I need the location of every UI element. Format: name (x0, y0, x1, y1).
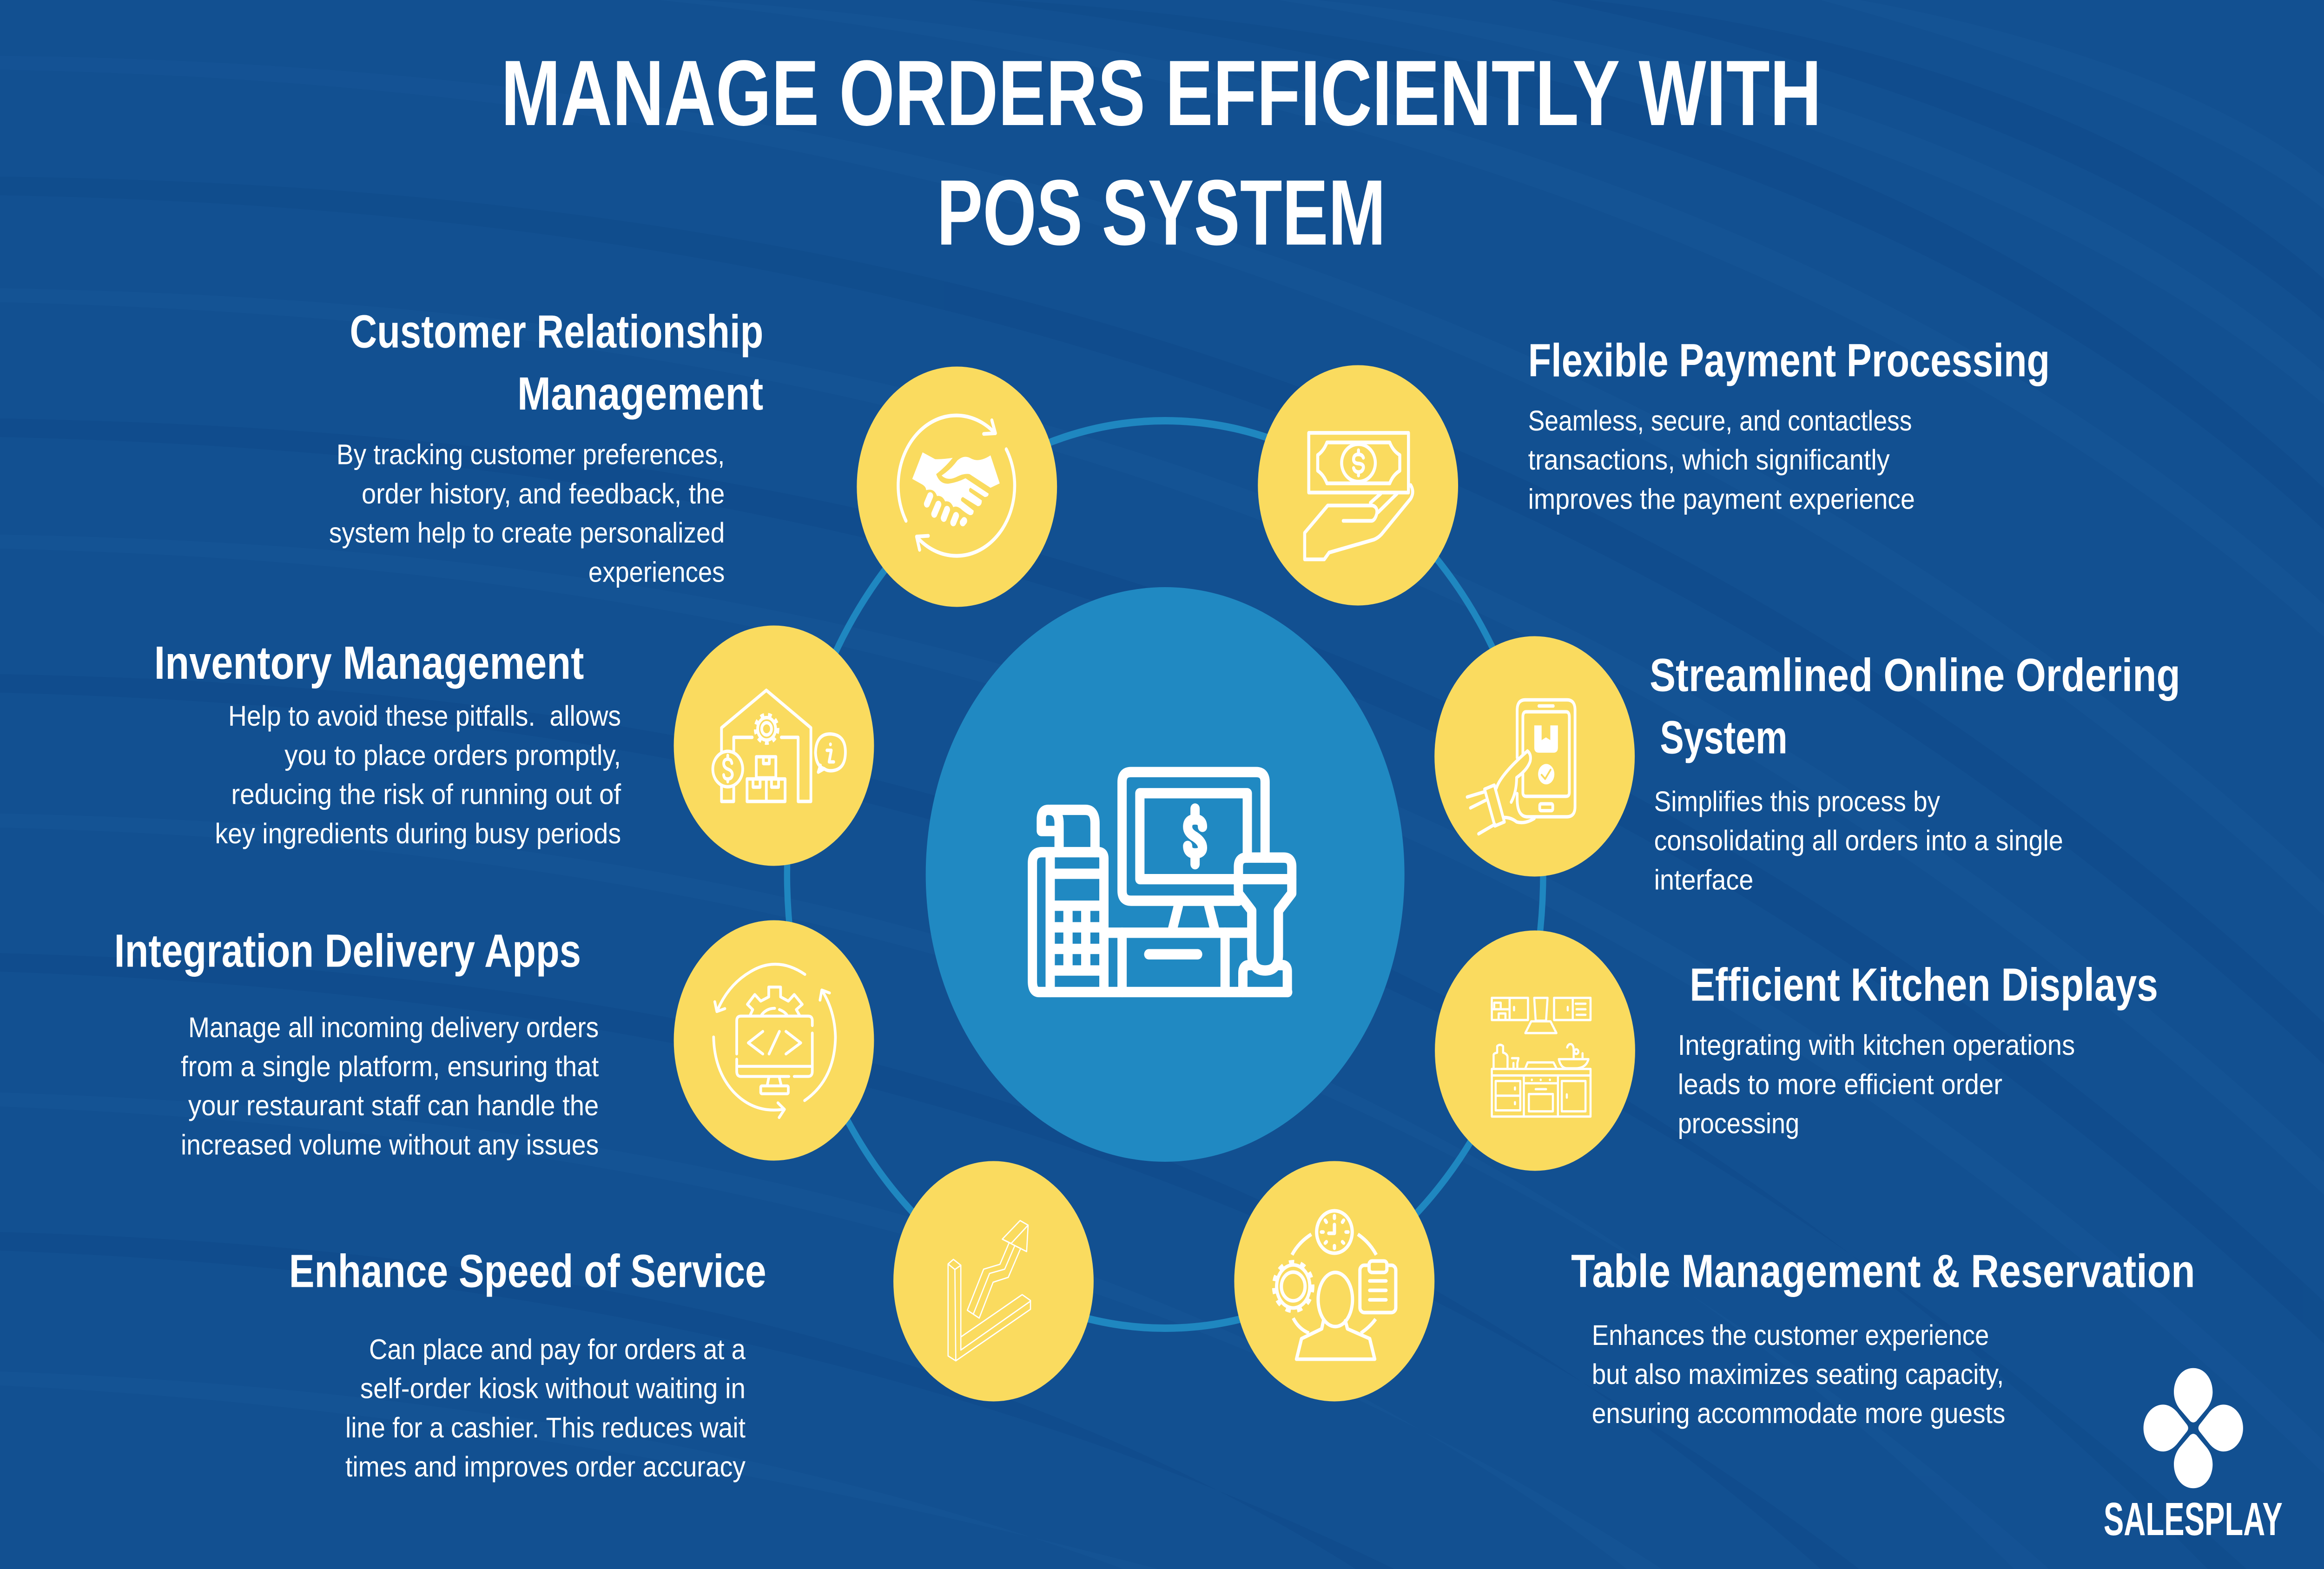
icon circle: speed of service (893, 1161, 1094, 1401)
body (329, 438, 725, 588)
body: By tracking customer preferences, (337, 438, 725, 470)
heading: Enhance Speed of Service (289, 1245, 766, 1297)
body: processing (1678, 1107, 1799, 1139)
icon circle: inventory (674, 626, 874, 866)
body: self-order kiosk without waiting in (360, 1372, 746, 1404)
heading: Streamlined Online Ordering (1650, 649, 2180, 701)
body (1528, 405, 1915, 515)
text block: efficient kitchen displays (1678, 958, 2158, 1139)
icon: warehouse (713, 690, 845, 801)
body: from a single platform, ensuring that (181, 1051, 599, 1082)
title (501, 41, 1822, 265)
body: improves the payment experience (1528, 483, 1915, 515)
body: experiences (588, 556, 725, 588)
body: order history, and feedback, the (362, 478, 725, 510)
body (1654, 785, 2063, 895)
central circle (926, 587, 1405, 1162)
body (1678, 1029, 2075, 1139)
text block: customer relationship (329, 305, 763, 588)
logo: SalesPlay (2104, 1368, 2283, 1545)
body: system help to create personalized (329, 517, 725, 549)
body: Simplifies this process by (1654, 785, 1941, 817)
text block: table management (1571, 1245, 2195, 1429)
body: your restaurant staff can handle the (188, 1090, 599, 1121)
icon: hand holding banknote (1305, 433, 1413, 559)
heading: Management (517, 367, 763, 420)
heading: Table Management & Reservation (1571, 1245, 2195, 1297)
icon circle: customer relationship (857, 366, 1057, 607)
text block: flexible payment processing (1528, 334, 2050, 515)
body: Seamless, secure, and contactless (1528, 405, 1912, 437)
body: increased volume without any issues (181, 1129, 599, 1160)
icon: handshake (898, 416, 1015, 556)
heading (1650, 649, 2180, 763)
body: ensuring accommodate more guests (1592, 1397, 2005, 1429)
icon circle: online ordering (1434, 636, 1635, 877)
icon: POS terminal (1032, 772, 1292, 992)
body (345, 1333, 746, 1483)
icon: kitchen (1492, 998, 1591, 1117)
logo mark (2144, 1368, 2243, 1488)
body: reducing the risk of running out of (231, 778, 621, 810)
heading: Efficient Kitchen Displays (1690, 958, 2158, 1011)
body: key ingredients during busy periods (215, 817, 621, 849)
heading: Inventory Management (154, 636, 584, 689)
body (181, 1011, 599, 1160)
body: Enhances the customer experience (1592, 1319, 1989, 1351)
body: Help to avoid these pitfalls. allows (228, 700, 621, 732)
body (215, 700, 621, 849)
title: MANAGE ORDERS EFFICIENTLY WITH (501, 41, 1822, 145)
body: transactions, which significantly (1528, 444, 1890, 476)
body: line for a cashier. This reduces wait (345, 1411, 746, 1443)
title: POS SYSTEM (937, 161, 1386, 265)
text block: integration delivery apps (114, 924, 599, 1160)
body: consolidating all orders into a single (1654, 825, 2063, 856)
icon circle: integration (674, 920, 874, 1160)
text block: enhance speed of service (289, 1245, 766, 1483)
icon circle: flexible payment (1258, 365, 1458, 605)
heading: Flexible Payment Processing (1528, 334, 2050, 386)
heading: Integration Delivery Apps (114, 924, 581, 977)
text block: inventory management (154, 636, 621, 849)
icon: person with clock, gear and clipboard (1274, 1211, 1396, 1359)
body: leads to more efficient order (1678, 1068, 2002, 1100)
heading: Customer Relationship (350, 305, 763, 357)
body: times and improves order accuracy (345, 1451, 746, 1483)
body: Integrating with kitchen operations (1678, 1029, 2075, 1061)
icon: rising arrow chart (948, 1221, 1030, 1361)
icon: code monitor with gear (713, 964, 835, 1118)
body: interface (1654, 864, 1753, 895)
body (1592, 1319, 2005, 1429)
icon circle: kitchen displays (1435, 931, 1635, 1171)
text block: streamlined online ordering (1650, 649, 2180, 895)
heading (350, 305, 763, 420)
connecting ring (787, 421, 1543, 1328)
icon: hand holding smartphone (1467, 700, 1575, 834)
icon circle: table management (1234, 1161, 1434, 1401)
body: Can place and pay for orders at a (369, 1333, 746, 1365)
body: you to place orders promptly, (284, 739, 621, 771)
body: but also maximizes seating capacity, (1592, 1358, 2004, 1390)
body: Manage all incoming delivery orders (188, 1011, 599, 1043)
heading: System (1660, 711, 1788, 763)
